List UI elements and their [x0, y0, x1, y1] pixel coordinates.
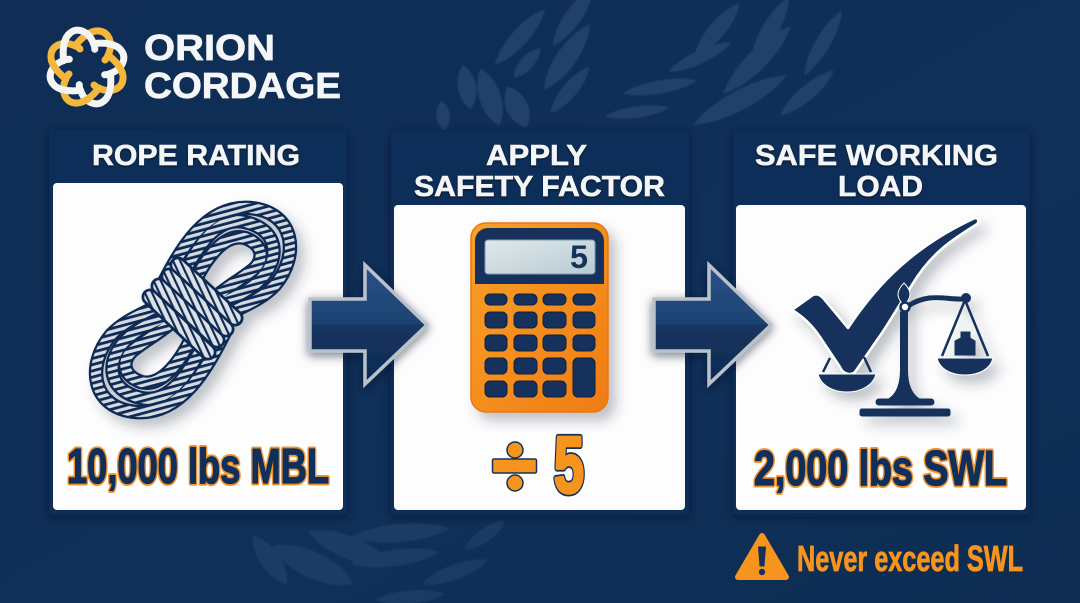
- heading: safe working load: [755, 140, 998, 203]
- panel body: [736, 205, 1026, 510]
- arrow: rating to safety factor: [310, 265, 427, 384]
- heading: apply safety factor: [414, 140, 665, 203]
- value: divide by 5: 5: [554, 420, 584, 509]
- panel: rope rating: [49, 130, 347, 514]
- logo wordmark: ORION: [144, 27, 275, 68]
- panel body: [53, 183, 343, 510]
- icon: warning triangle: [738, 536, 786, 577]
- value: 2,000 lbs SWL: 2,000 lbs SWL: [754, 442, 1007, 496]
- background rope texture: upper: [435, 0, 848, 133]
- panel frame: [733, 130, 1030, 514]
- icon: check mark and balance scale: [792, 218, 993, 416]
- value: 10,000 lbs MBL: 10,000 lbs MBL: [67, 440, 329, 494]
- arrow: safety factor to working load: [654, 265, 771, 384]
- panel frame: [391, 130, 689, 514]
- scale pivot: [900, 302, 910, 312]
- heading: safe working load: SAFE WORKING: [755, 140, 998, 172]
- logo wordmark: [144, 27, 341, 106]
- heading: apply safety factor: SAFETY FACTOR: [414, 171, 665, 203]
- icon: calculator: 5: [570, 239, 588, 275]
- value: 10,000 lbs MBL: 10,000 lbs MBL: [67, 440, 329, 494]
- heading: safe working load: LOAD: [838, 171, 923, 203]
- panel body: [394, 205, 685, 510]
- logo: [45, 25, 341, 109]
- value: divide by 5: 5: [554, 420, 584, 509]
- balance scale: [818, 283, 993, 416]
- icon: coiled rope: [96, 208, 290, 412]
- panel: apply safety factor: [391, 130, 689, 514]
- background rope texture: lower: [245, 515, 509, 603]
- callout: never exceed SWL: [738, 536, 1023, 579]
- panel frame: [49, 130, 347, 514]
- logo wordmark: CORDAGE: [144, 65, 341, 106]
- icon: calculator: [471, 223, 608, 412]
- logo mark: woven ring: [45, 25, 129, 109]
- check mark: [792, 218, 978, 374]
- heading: rope rating: ROPE RATING: [92, 140, 300, 172]
- heading: apply safety factor: APPLY: [486, 140, 587, 172]
- value: divide by 5: [492, 420, 584, 509]
- panel: safe working load: [733, 130, 1030, 514]
- value: 2,000 lbs SWL: 2,000 lbs SWL: [754, 442, 1007, 496]
